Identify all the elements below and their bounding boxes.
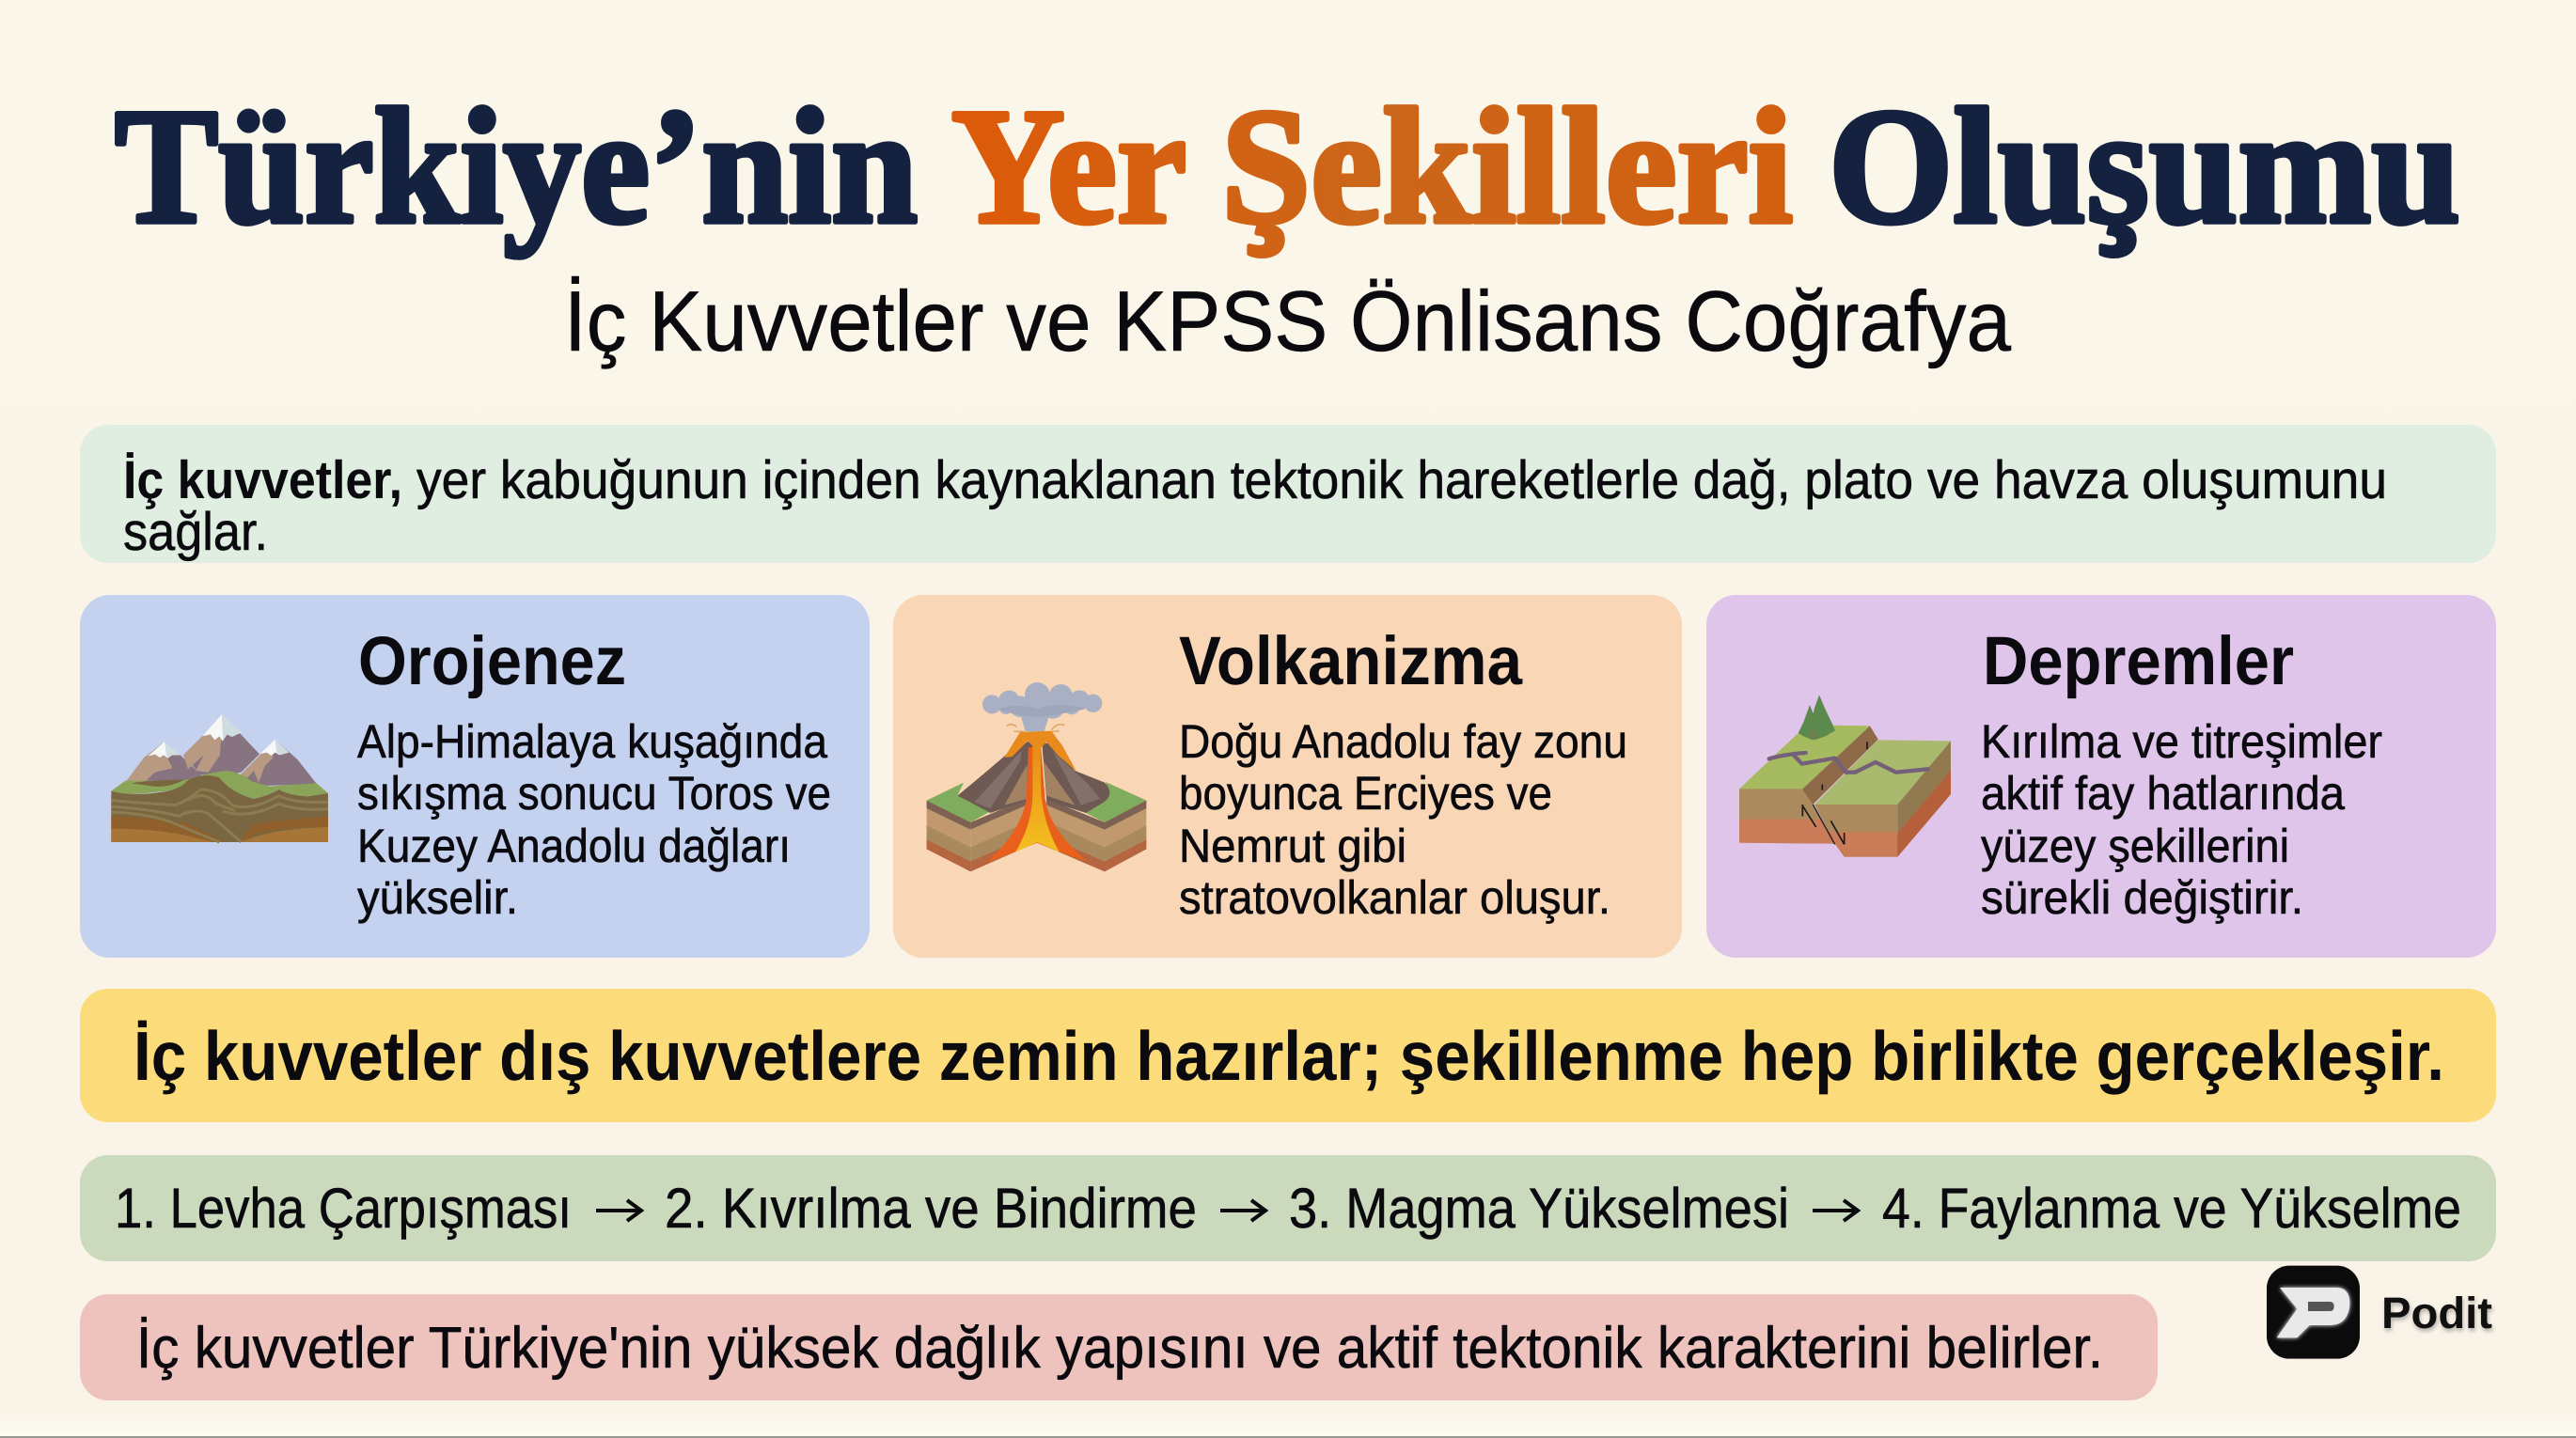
text: Depremler body: aktif fay hatlarında [1981,767,2345,820]
panel: definition [80,425,2496,563]
text: Orojenez body: sıkışma sonucu Toros ve [357,767,831,820]
text: Volkanizma body: boyunca Erciyes ve [1179,767,1552,820]
text: Volkanizma body: stratovolkanlar oluşur. [1179,871,1610,924]
text: Volkanizma body: Doğu Anadolu fay zonu [1179,715,1627,768]
heading: Depremler: Depremler [1983,623,2294,699]
arrow: step 3 to 4 [1813,1200,1858,1221]
brand name: Podit [2382,1290,2493,1340]
text: Volkanizma body: Nemrut gibi [1179,820,1406,872]
panel: process steps: 2. Kıvrılma ve Bindirme [665,1177,1197,1240]
subtitle: İç Kuvvetler ve KPSS Önlisans Coğrafya [564,274,2011,369]
title [115,75,2460,258]
brand name: Podit [2381,1288,2492,1337]
panel: process steps: 1. Levha Çarpışması [115,1177,572,1240]
heading: Orojenez: Orojenez [358,623,626,699]
text: Depremler body: Kırılma ve titreşimler [1981,715,2382,768]
arrow: step 1 to 2 [596,1200,641,1221]
text: Orojenez body: Alp-Himalaya kuşağında [357,715,827,768]
panel: definition: İç kuvvetler, [123,450,402,510]
panel: process steps: 3. Magma Yükselmesi [1289,1177,1789,1240]
icon: mountains with folded strata [111,714,328,842]
heading: Volkanizma: Volkanizma [1179,623,1523,699]
text: Orojenez body: Kuzey Anadolu dağları [357,820,791,872]
text: Orojenez body [357,715,831,924]
panel: Orojenez [80,595,870,958]
text: Depremler body [1981,715,2382,924]
callout: yellow key message [80,989,2496,1122]
panel: Depremler [1706,595,2496,958]
panel: Volkanizma [893,595,1682,958]
panel: process steps: 4. Faylanma ve Yükselme [1882,1177,2461,1240]
callout: conclusion: İç kuvvetler Türkiye'nin yüksek dağlık yapısını ve aktif tektonik karakterini belirler. [136,1316,2103,1381]
arrow: step 2 to 3 [1220,1200,1265,1221]
text: Depremler body: sürekli değiştirir. [1981,871,2303,924]
icon: Podit logo [2267,1266,2360,1359]
title: Yer [951,75,1186,258]
panel: process steps [80,1155,2496,1261]
title: Oluşumu [1829,75,2460,258]
text: Volkanizma body [1179,715,1627,924]
panel: definition: sağlar. [123,502,268,562]
callout: conclusion [80,1294,2158,1400]
icon: fault block with tree [1739,695,1951,857]
title: Şekilleri [1221,75,1793,258]
text: Orojenez body: yükselir. [357,871,518,924]
title: Türkiye’nin [115,75,918,258]
panel: definition: yer kabuğunun içinden kaynaklanan tektonik hareketlerle dağ, plato ve havza oluşumunu [416,450,2387,510]
text: Depremler body: yüzey şekillerini [1981,820,2289,872]
icon: volcano cross-section [927,682,1146,871]
